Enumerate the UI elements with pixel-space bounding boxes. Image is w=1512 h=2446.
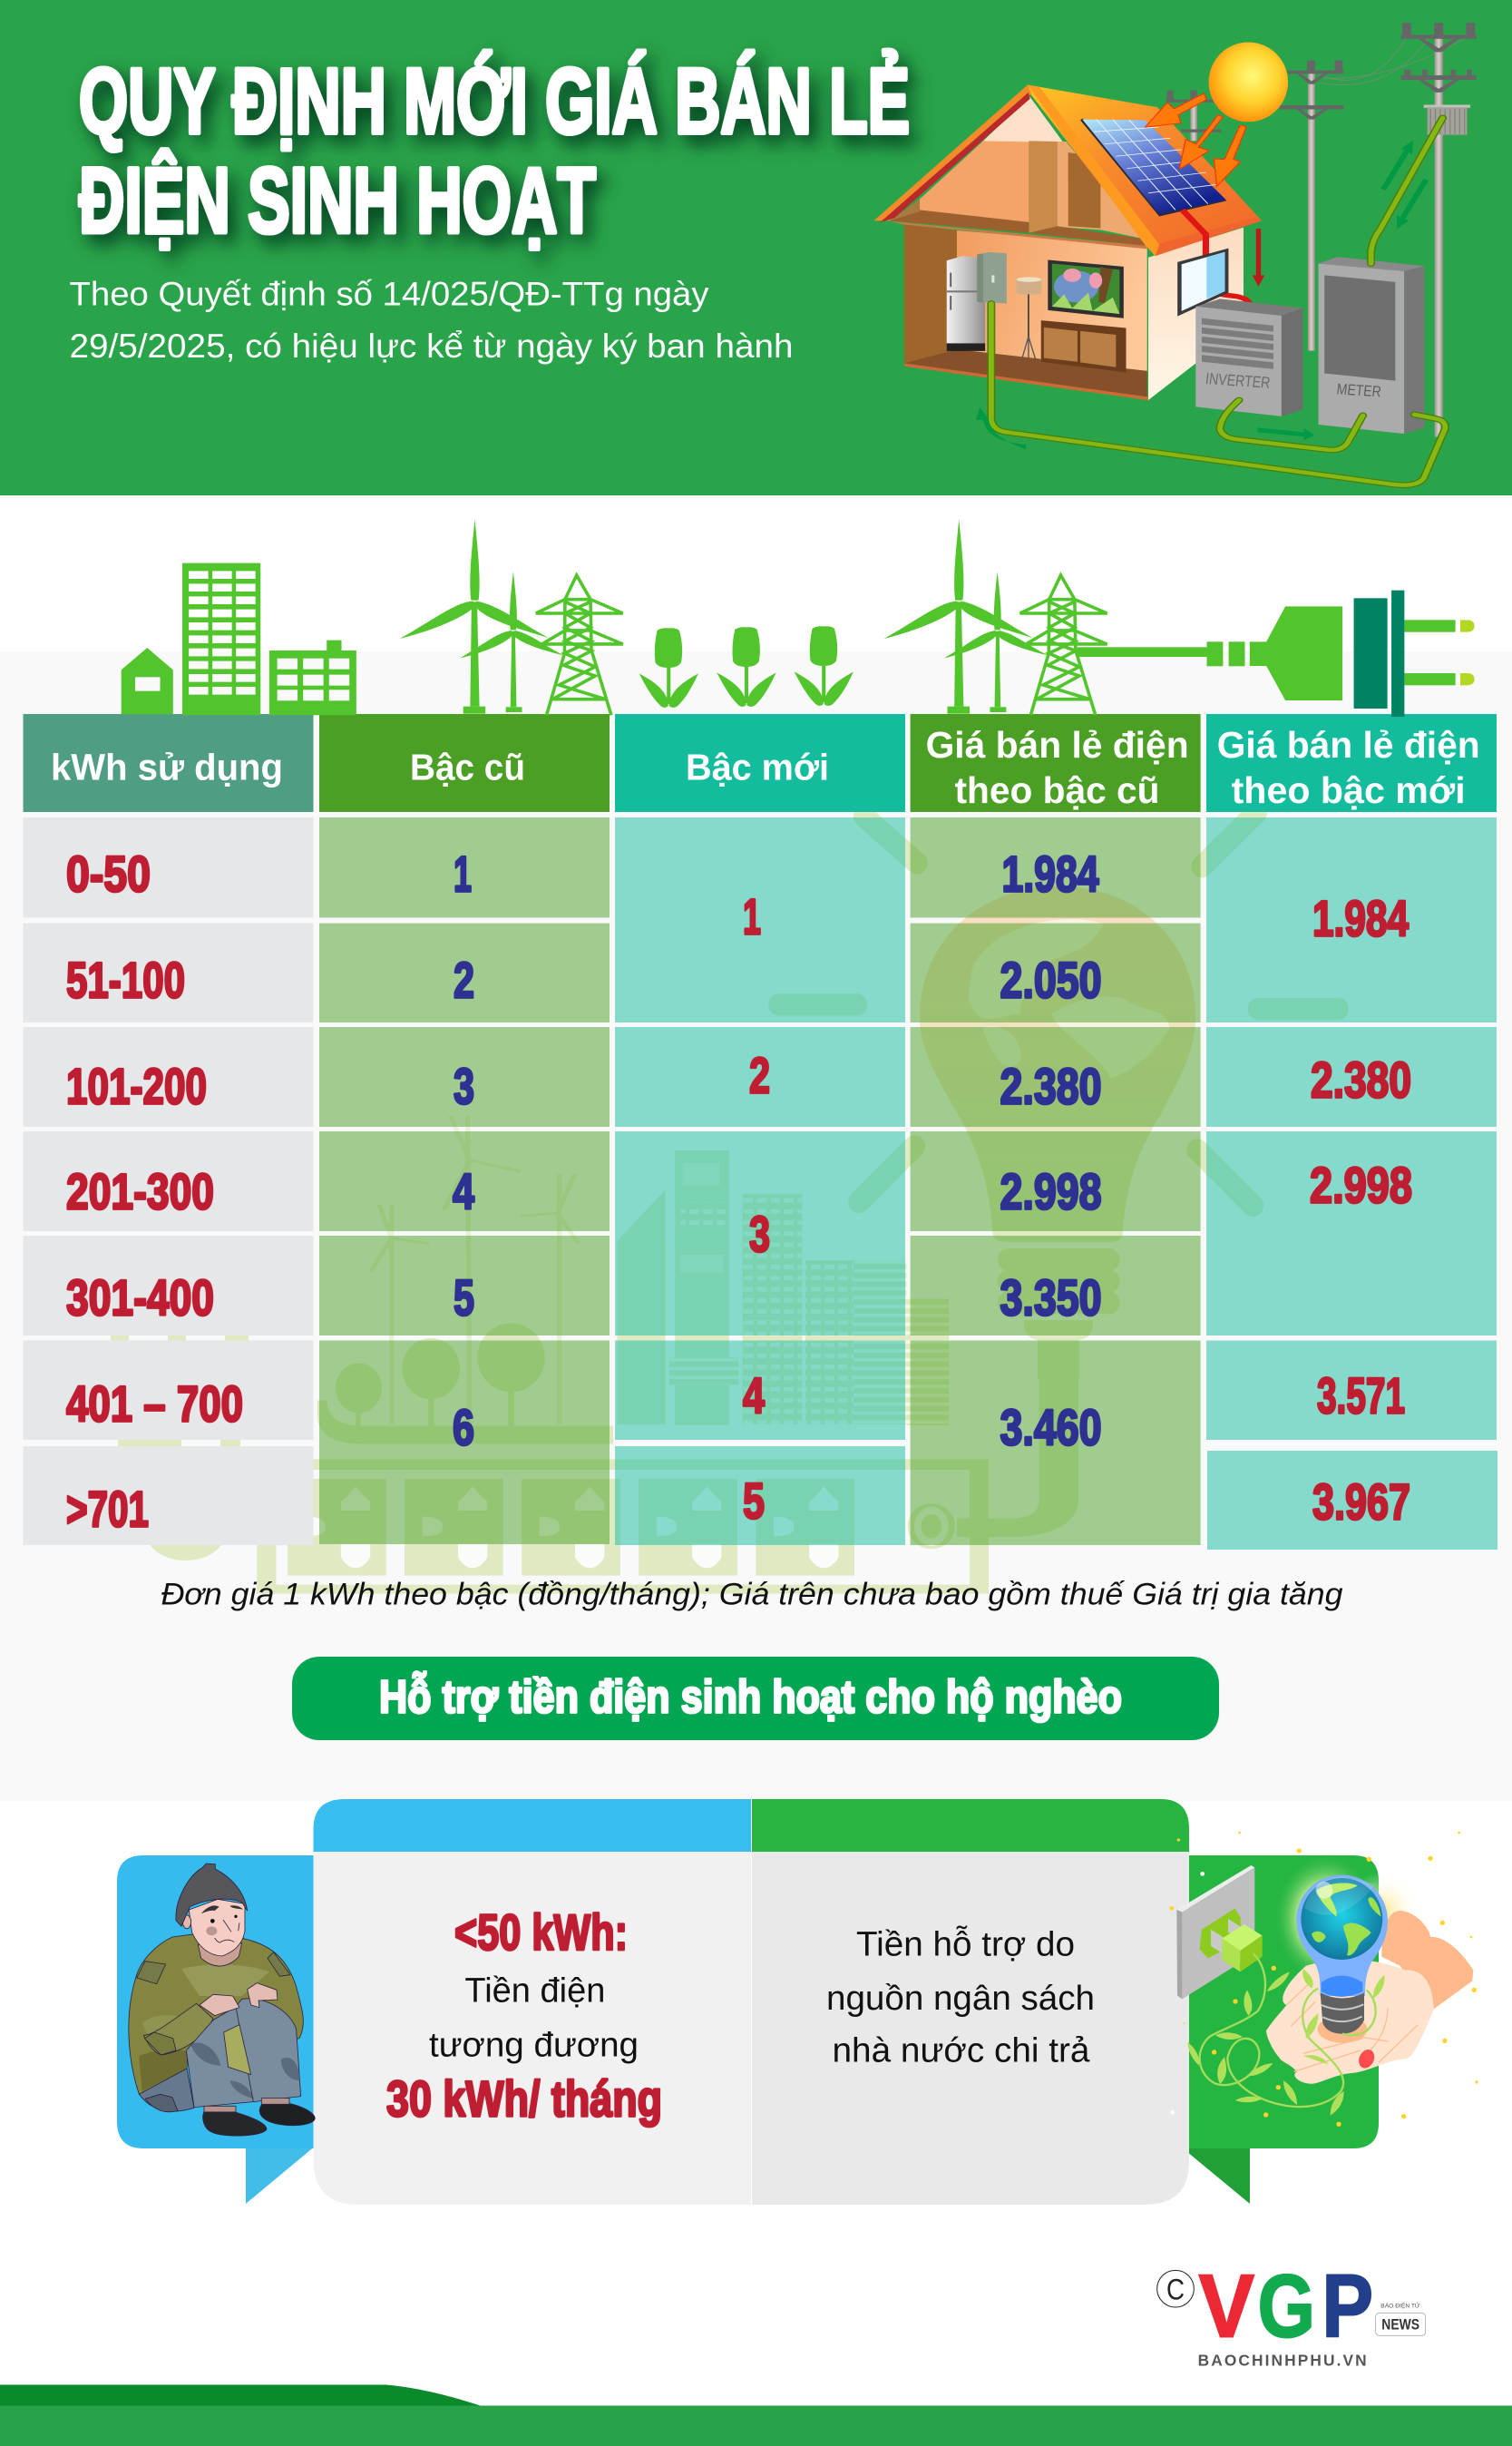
hand [1266, 1960, 1434, 2084]
copyright mark [1157, 2270, 1194, 2307]
house walls and interior [890, 96, 1244, 400]
skyline: tulip 1 [639, 628, 698, 708]
inverter box: INVERTER [1205, 370, 1271, 392]
card right header [752, 1799, 1189, 1852]
old price values: 2.380 [1000, 1058, 1101, 1114]
table header labels: Giá bán lẻ điện [1217, 724, 1480, 766]
green wiring [991, 118, 1445, 485]
table header labels: Giá bán lẻ điện [926, 724, 1189, 766]
title: ĐIỆN SINH HOẠT [79, 149, 596, 252]
wall socket plate [1176, 1865, 1254, 1999]
skyline: tulip 3 [795, 626, 854, 706]
icon: electric plug [1078, 591, 1475, 717]
card left header [314, 1799, 751, 1852]
column: kWh usage cells [24, 817, 314, 1545]
news badge: BÁO ĐIỆN TỬ [1380, 2302, 1420, 2310]
skyline: buildings [122, 563, 356, 715]
red down arrow [1253, 229, 1264, 287]
table header labels: kWh sử dụng [51, 747, 283, 788]
subtitle [69, 276, 793, 365]
electric poles [1166, 23, 1477, 437]
old tier values: 5 [454, 1268, 474, 1326]
footer green band [0, 2406, 1512, 2446]
electric box [977, 252, 1007, 303]
column: new price cells [1206, 817, 1497, 1550]
left card text: tương đương [429, 2026, 639, 2064]
kWh range values: >701 [66, 1481, 149, 1537]
kWh range values: 401 – 700 [66, 1375, 243, 1432]
old price values: 3.460 [1000, 1399, 1101, 1455]
new price values: 2.380 [1311, 1051, 1411, 1109]
neck and head [198, 1943, 242, 1966]
green flow arrows [976, 141, 1429, 449]
television [1048, 259, 1124, 318]
VGP letters: P [1322, 2256, 1373, 2356]
new tier values [743, 887, 770, 1530]
kWh range values [66, 846, 243, 1537]
new tier values: 2 [749, 1047, 770, 1103]
column: old tier cells [319, 817, 610, 1544]
VGP letters: V [1199, 2256, 1254, 2356]
floor lamp [1017, 277, 1041, 360]
new tier values: 3 [749, 1205, 770, 1263]
table header labels: theo bậc mới [1232, 769, 1466, 811]
panel: support for poor households [117, 1799, 1478, 2205]
table footnote: Đơn giá 1 kWh theo bậc (đồng/tháng); Giá trên chưa bao gồm thuế Giá trị gia tăng [161, 1577, 1343, 1611]
table header labels [51, 724, 1480, 811]
VGP letters: G [1258, 2256, 1315, 2356]
sun [1209, 43, 1288, 122]
old tier values: 6 [453, 1399, 474, 1455]
roof [873, 84, 1262, 256]
title: QUY ĐỊNH MỚI GIÁ BÁN LẺ [79, 49, 910, 152]
new price values: 1.984 [1312, 889, 1409, 947]
left card text: <50 kWh: [454, 1903, 628, 1961]
meter box: METER [1336, 381, 1382, 401]
old tier values: 3 [454, 1058, 474, 1114]
old tier values: 2 [454, 951, 474, 1009]
header background band [0, 0, 1512, 495]
left card text: Tiền điện [464, 1972, 605, 2011]
new price values: 3.967 [1312, 1473, 1410, 1530]
hands [200, 1994, 239, 2016]
sweater [129, 1934, 303, 2094]
background watermark: light bulb, city and sockets [111, 813, 1338, 1594]
right card text: nguồn ngân sách [826, 1980, 1095, 2018]
column: old price cells [911, 817, 1201, 1545]
kWh range values: 301-400 [66, 1268, 214, 1326]
old price values: 3.350 [1000, 1268, 1101, 1326]
old tier values: 1 [454, 846, 472, 902]
old price values: 2.050 [1000, 951, 1101, 1009]
lower tinted background [0, 651, 1512, 1801]
panel: price table [24, 714, 1497, 1550]
column: new tier cells [615, 817, 905, 1545]
site address: BAOCHINHPHU.VN [1198, 2352, 1367, 2370]
card right column body [752, 1852, 1189, 2205]
left blue bubble [117, 1855, 314, 2148]
red nail [1356, 2047, 1377, 2070]
news badge: NEWS [1381, 2316, 1419, 2333]
window [1177, 249, 1228, 317]
new tier values: 1 [743, 887, 761, 945]
new tier values: 4 [743, 1366, 765, 1424]
old tier values [453, 846, 474, 1455]
vine with leaves [1187, 1953, 1385, 2116]
news badge [1376, 2302, 1426, 2335]
new price values: 3.571 [1317, 1366, 1405, 1424]
new price values [1310, 889, 1412, 1530]
right green speech tail [1182, 2148, 1250, 2204]
left blue speech tail [246, 2148, 314, 2204]
right card text [826, 1925, 1095, 2070]
table header cells [24, 714, 1497, 812]
light bulb [1296, 1875, 1388, 2034]
patches [224, 2025, 251, 2075]
right card text: Tiền hỗ trợ do [856, 1925, 1075, 1964]
new price values: 2.998 [1310, 1156, 1412, 1214]
illustration: solar house [873, 23, 1477, 485]
section heading pill: Hỗ trợ tiền điện sinh hoạt cho hộ nghèo [379, 1671, 1122, 1722]
copyright mark: C [1166, 2272, 1185, 2305]
old price values [1000, 846, 1101, 1455]
skyline: tulip 2 [717, 627, 776, 707]
section heading pill [292, 1657, 1219, 1740]
kWh range values: 0-50 [66, 846, 151, 902]
shoes [203, 2111, 267, 2136]
red power cable [1183, 210, 1251, 309]
logo: VGP News [1157, 2256, 1426, 2370]
subtitle: 29/5/2025, có hiệu lực kể từ ngày ký ban hành [69, 328, 793, 365]
VGP letters [1199, 2256, 1373, 2356]
left card text: 30 kWh/ tháng [386, 2070, 662, 2127]
solar panel [1080, 119, 1227, 216]
skyline: wind turbines and pylon right [884, 520, 1107, 715]
table header labels: Bậc cũ [410, 747, 525, 788]
kWh range values: 101-200 [66, 1058, 207, 1114]
yellow sparkle dots [1169, 1832, 1478, 2127]
table header labels: Bậc mới [686, 747, 829, 788]
left card text [386, 1903, 662, 2127]
old tier values: 4 [453, 1163, 474, 1219]
card left column body [314, 1852, 751, 2205]
plug [1200, 1908, 1263, 1971]
old price values: 2.998 [1000, 1163, 1101, 1219]
meter box [1319, 257, 1424, 434]
cabinet [1041, 320, 1126, 373]
skyline: wind turbines and pylon left [400, 520, 623, 715]
kWh range values: 201-300 [66, 1163, 214, 1219]
fridge [947, 256, 985, 351]
sun ray arrows [1145, 93, 1246, 186]
new tier values: 5 [743, 1472, 765, 1530]
footer dark tab [0, 2384, 482, 2406]
right green bubble [1182, 1855, 1379, 2148]
subtitle: Theo Quyết định số 14/025/QĐ-TTg ngày [69, 276, 709, 313]
table header labels: theo bậc cũ [954, 769, 1159, 811]
old price values: 1.984 [1001, 846, 1099, 902]
inverter box [1195, 298, 1303, 416]
forearm [1381, 1911, 1473, 2010]
illustration: earth bulb in hands [1169, 1832, 1478, 2127]
title [79, 49, 910, 252]
glow [1273, 1853, 1421, 1984]
sleeve [143, 2003, 213, 2055]
trousers [139, 2069, 194, 2111]
kWh range values: 51-100 [66, 951, 185, 1009]
illustration: poor man sitting [129, 1864, 315, 2136]
right card text: nhà nước chi trả [833, 2032, 1090, 2070]
